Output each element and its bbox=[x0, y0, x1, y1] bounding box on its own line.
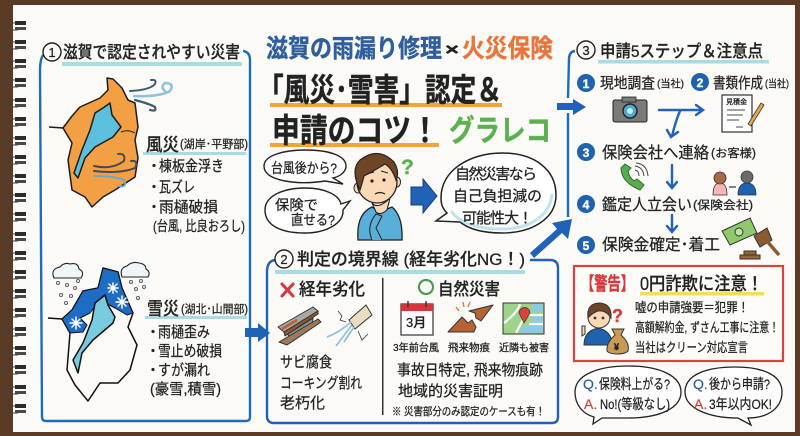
FAQ bubble 2: 後から申請? bbox=[709, 376, 770, 392]
wind damage text bbox=[143, 135, 248, 234]
speech bubble: answer: 可能性大！ bbox=[462, 210, 533, 227]
FAQ bubble 1: No!(等級なし) bbox=[600, 396, 670, 412]
icon: rusty steel beam bbox=[278, 307, 321, 345]
warning box bbox=[574, 266, 783, 361]
FAQ bubble 2: 3年以内OK! bbox=[709, 396, 772, 412]
natural disaster evidence: 事故日特定, 飛来物痕跡 bbox=[397, 362, 543, 379]
icon captions: 3年前台風 bbox=[393, 341, 439, 354]
snow damage text: (豪雪,積雪) bbox=[150, 381, 221, 398]
wind damage text: ・ bbox=[147, 179, 161, 195]
aging symptoms: コーキング割れ bbox=[280, 375, 362, 392]
arrow: panel 1 to panel 2 bbox=[245, 323, 270, 342]
snow damage text: (湖北･山間部) bbox=[181, 302, 248, 316]
panel 3 heading: 申請5ステップ＆注意点 bbox=[600, 42, 763, 61]
map: snow damage bbox=[48, 268, 137, 401]
panel 1 heading bbox=[43, 43, 242, 66]
FAQ bubble 1: A. bbox=[584, 396, 597, 412]
speech bubble: after typhoon: 台風後から? bbox=[271, 160, 337, 176]
speech bubble: answer bbox=[436, 153, 556, 233]
snow damage text: 雪災 bbox=[147, 299, 179, 319]
icon captions bbox=[393, 341, 549, 354]
warning text: 当社はクリーン対応宣言 bbox=[635, 340, 748, 355]
step 2: (当社) bbox=[765, 77, 789, 90]
snow damage text: 雨樋歪み bbox=[158, 324, 210, 341]
arrow: step 3 to 4 bbox=[667, 165, 677, 188]
wind damage text: 風災 bbox=[146, 135, 179, 155]
step 2 bbox=[691, 73, 789, 92]
warning text: 嘘の申請強要＝犯罪！ bbox=[635, 300, 749, 315]
icon: calendar bbox=[401, 301, 433, 335]
wind damage text: ・ bbox=[147, 199, 161, 215]
wind damage text: 棟板金浮き bbox=[159, 158, 224, 175]
step 2: 2 bbox=[697, 76, 704, 90]
icon: money bag: ¥ bbox=[614, 342, 619, 352]
icon: money and gavel bbox=[722, 218, 779, 259]
step 1: 1 bbox=[583, 77, 590, 91]
panel 1 border bbox=[40, 51, 250, 421]
FAQ bubble 2: Q. bbox=[693, 376, 708, 392]
icon captions: 飛来物痕 bbox=[448, 341, 490, 354]
aging heading: 経年劣化 bbox=[299, 280, 365, 299]
FAQ bubble 2: A. bbox=[694, 396, 707, 412]
panel 1 heading: 1 bbox=[48, 45, 56, 60]
FAQ bubble 1 bbox=[575, 366, 681, 424]
natural disaster evidence: 地域的災害証明 bbox=[398, 383, 503, 400]
person thinking bbox=[354, 153, 402, 240]
speech bubble: covered by insurance: 保険で bbox=[275, 197, 318, 213]
icon: broken board bbox=[448, 302, 493, 332]
step 5: 5 bbox=[583, 239, 590, 253]
icon: customer and adjuster bbox=[713, 171, 756, 195]
step 3 bbox=[577, 143, 756, 162]
natural disaster heading bbox=[419, 279, 500, 299]
icon: red question mark: ? bbox=[612, 306, 623, 326]
main title: グラレコ bbox=[449, 115, 551, 148]
panel 2: boundary bbox=[267, 250, 558, 423]
warning heading: 0円詐欺に注意！ bbox=[640, 274, 763, 294]
icon: question mark: ? bbox=[401, 156, 414, 179]
divider bbox=[382, 278, 384, 415]
icon: snowflakes bbox=[70, 283, 128, 329]
main title bbox=[258, 35, 553, 149]
warning person bbox=[582, 303, 612, 345]
wind damage text: ・ bbox=[147, 158, 161, 174]
aging symptoms: 老朽化 bbox=[280, 395, 325, 412]
speech bubble: covered by insurance: 直せる? bbox=[291, 212, 335, 228]
arrow to answer bubble bbox=[411, 179, 437, 213]
natural disaster evidence bbox=[392, 362, 545, 418]
icon: estimate document bbox=[722, 95, 764, 132]
speech bubble: answer: 自己負担減の bbox=[453, 188, 542, 205]
FAQ bubble 2 bbox=[685, 367, 782, 425]
step 5: 保険金確定･着工 bbox=[602, 236, 720, 254]
spiral binding bbox=[3, 21, 26, 413]
icon: estimate document: 見積金 bbox=[726, 97, 747, 106]
icon: wind gusts bbox=[94, 80, 172, 186]
main title: 申請のコツ！ bbox=[272, 112, 439, 149]
speech bubble: covered by insurance bbox=[265, 188, 350, 233]
main title: 火災保険 bbox=[462, 35, 553, 63]
step 3: (お客様) bbox=[711, 146, 756, 160]
step 4 bbox=[577, 195, 753, 214]
natural disaster evidence: ※ 災害部分のみ認定のケースも有！ bbox=[392, 404, 545, 418]
panel 2 border bbox=[267, 260, 558, 423]
icon: calendar: 3月 bbox=[406, 315, 426, 330]
warning heading: 【警告】 bbox=[581, 274, 634, 294]
icon captions: 近隣も被害 bbox=[499, 341, 549, 354]
panel 3: steps bbox=[577, 41, 789, 259]
step 1 bbox=[577, 74, 684, 92]
snow damage text: ・ bbox=[146, 324, 160, 340]
main title: × bbox=[445, 40, 459, 59]
wind damage text: (湖岸･平野部) bbox=[180, 137, 248, 151]
warning text bbox=[635, 300, 779, 355]
FAQ bubble 1: Q. bbox=[583, 376, 598, 392]
arrow: step 4 to 5 bbox=[667, 215, 677, 232]
step 3: 保険会社へ連絡 bbox=[602, 144, 709, 162]
snow damage text: 雪止め破損 bbox=[158, 343, 222, 360]
warning heading bbox=[581, 274, 764, 296]
step 2: 書類作成 bbox=[713, 75, 763, 92]
icon: money bag bbox=[607, 329, 628, 354]
panel 1 heading: 滋賀で認定されやすい災害 bbox=[63, 43, 240, 62]
icon: phone bbox=[621, 163, 648, 190]
panel 1: disasters bbox=[40, 43, 250, 421]
icon: camera bbox=[613, 97, 647, 122]
step 1: 現地調査 bbox=[600, 75, 655, 92]
icon: cracked caulking bbox=[327, 305, 372, 346]
main title: 滋賀の雨漏り修理 bbox=[266, 35, 442, 63]
arrow: panel 2 to panel 3 bbox=[530, 219, 572, 258]
step 4: (保険会社) bbox=[693, 198, 753, 212]
wind damage text: 雨樋破損 bbox=[159, 199, 218, 216]
snow damage text bbox=[145, 299, 248, 398]
step 3: 3 bbox=[583, 146, 590, 160]
map: wind damage bbox=[49, 78, 138, 207]
speech bubble: answer: 自然災害なら bbox=[455, 166, 537, 183]
wind damage text: 瓦ズレ bbox=[159, 179, 195, 196]
snow damage text: ・ bbox=[146, 362, 160, 378]
arrow: step 1 to 2 and 3 bbox=[659, 105, 703, 137]
natural disaster heading: 自然災害 bbox=[438, 279, 500, 299]
wind damage text: (台風, 比良おろし) bbox=[153, 218, 245, 234]
speech bubble: after typhoon bbox=[264, 150, 346, 184]
step 4: 4 bbox=[583, 198, 590, 212]
panel 3 heading: 3 bbox=[582, 43, 590, 58]
snow damage text: ・ bbox=[146, 343, 160, 359]
aging symptoms bbox=[280, 354, 362, 412]
flow line with arrows bbox=[557, 51, 586, 217]
snow damage text: すが漏れ bbox=[158, 362, 210, 379]
icon: snow clouds bbox=[53, 262, 149, 305]
step 4: 鑑定人立会い bbox=[602, 196, 692, 214]
panel 2 heading: 判定の境界線 (経年劣化NG！) bbox=[297, 250, 525, 269]
main title: 「風災･雪害」認定＆ bbox=[258, 72, 502, 108]
FAQ bubble 1: 保険料上がる? bbox=[599, 376, 670, 392]
aging symptoms: サビ腐食 bbox=[280, 354, 332, 371]
panel 2 heading: 2 bbox=[280, 252, 288, 267]
icon: map pin bbox=[503, 303, 544, 334]
step 1: (当社) bbox=[657, 77, 684, 90]
